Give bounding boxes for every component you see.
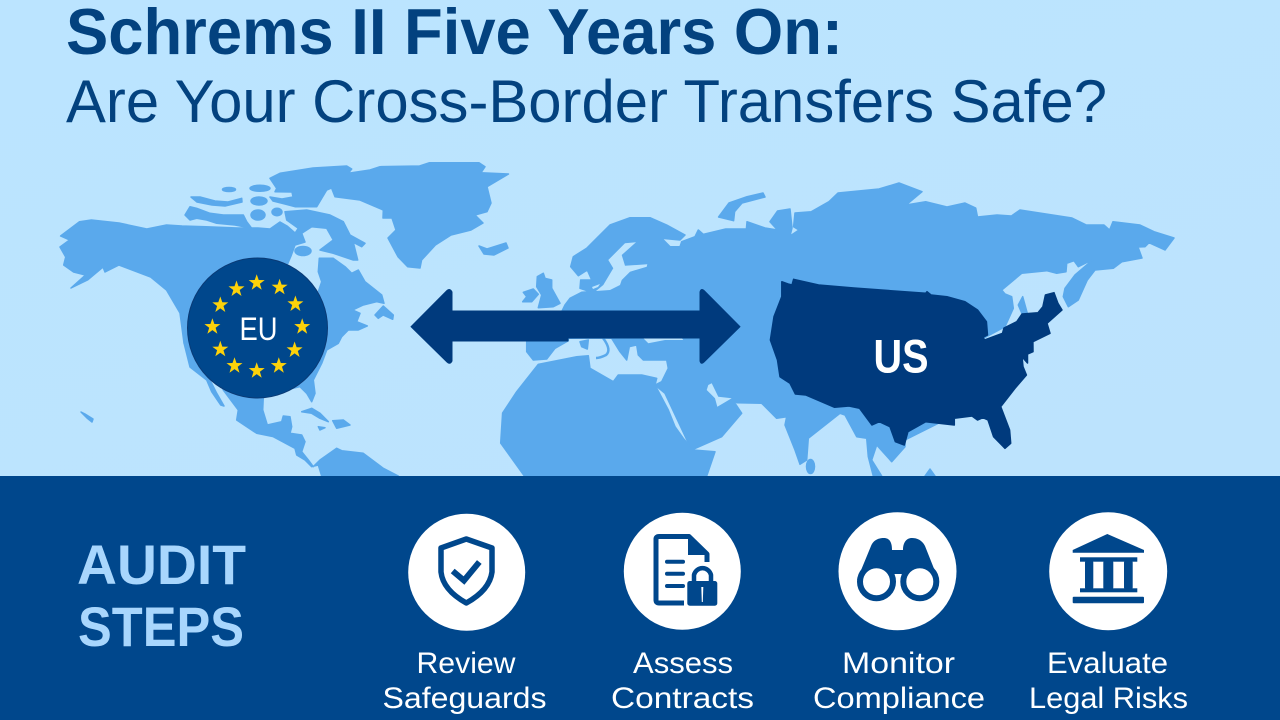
heading: audit steps: STEPS [78,595,244,658]
title: Are Your Cross-Border Transfers Safe? [66,68,1107,135]
map: Baja California [184,343,224,406]
US label: US [874,330,928,382]
US silhouette [770,279,1062,448]
step: review safeguards [382,514,546,715]
step: monitor compliance [813,512,985,715]
title [66,0,1107,135]
label: Evaluate [1047,647,1168,680]
map: Eurasia [527,183,1174,476]
map: Caribbean islands [81,408,350,430]
map: Borneo [925,469,935,476]
map: Africa [501,356,715,476]
step: assess contracts [611,513,754,715]
step: evaluate legal risks: Legal Risks [1029,682,1188,715]
step: assess contracts: Contracts [611,682,754,715]
world map [60,163,1174,476]
double-headed arrow [411,290,740,363]
map: Arctic islands [185,185,393,319]
icon: courthouse [1073,534,1144,603]
map: Sardinia [580,340,588,349]
icon: binoculars [857,538,938,598]
step: monitor compliance: Compliance [813,682,985,715]
map: Great Britain [537,273,560,308]
map: North and Central America [60,220,398,476]
EU stars [204,274,310,378]
label: Review [416,647,516,680]
map: Japan sliver [1018,297,1027,313]
EU label: EU [240,311,278,347]
step: evaluate legal risks [1029,512,1188,715]
step: review safeguards: Safeguards [382,682,546,715]
map: Ireland [523,289,538,302]
map: Sri Lanka [806,460,814,474]
map: Novaya Zemlya [719,193,765,221]
panel: audit steps [0,476,1280,720]
heading: audit steps: AUDIT [77,533,246,596]
label: Assess [633,647,733,680]
map: Italy [596,338,608,358]
inland seas [592,242,732,407]
EU badge [188,258,328,398]
heading: audit steps [77,533,246,658]
map: Iceland [479,243,508,255]
map: Greenland and Ellesmere [270,163,508,268]
icon: document with padlock [656,535,717,606]
label: Monitor [842,647,955,680]
icon: shield with check [441,539,492,603]
